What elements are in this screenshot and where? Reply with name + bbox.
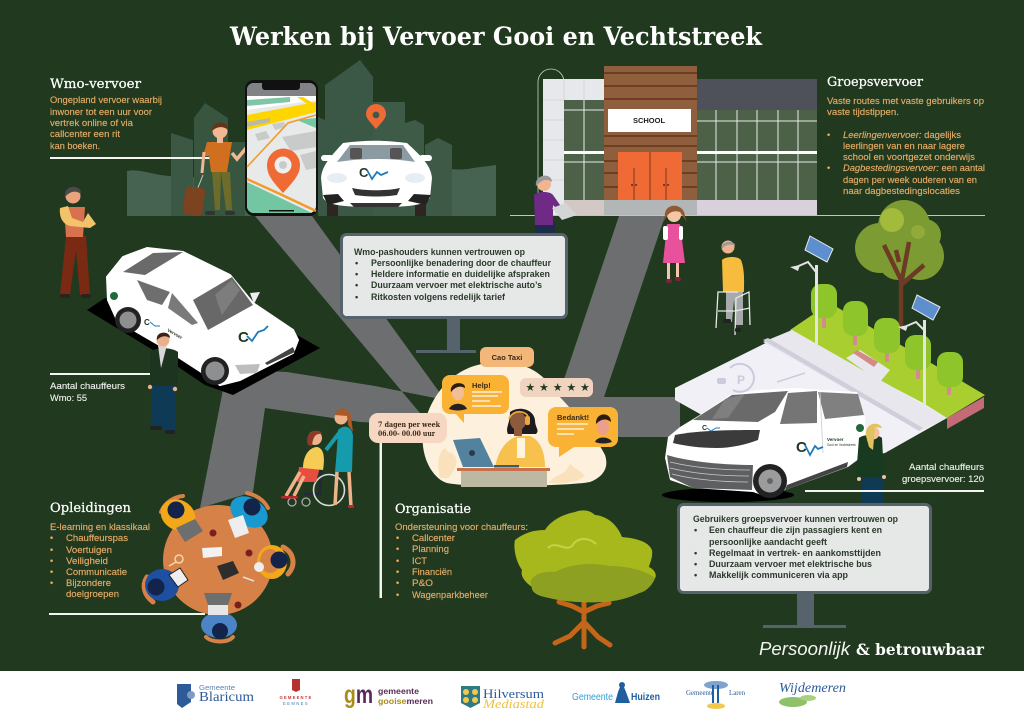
list: Opleidingen: • xyxy=(50,556,53,566)
list: Opleidingen: E-learning en klassikaal xyxy=(50,522,150,532)
illustration: older woman with paper xyxy=(534,176,577,234)
icon: man with suitcase xyxy=(182,123,247,216)
illustration: tree bottom xyxy=(514,510,656,647)
illustration: parking platform xyxy=(675,330,947,470)
illustration: callcenter scene xyxy=(423,362,606,487)
billboard: Gebruikers groepsvervoer xyxy=(678,504,930,628)
callout: Help speech bubble xyxy=(442,375,509,423)
list: Organisatie: • xyxy=(396,567,399,577)
list: Organisatie: ICT xyxy=(412,556,427,566)
text: Gebruikers groepsvervoer list: Een chauffeur die zijn passagiers kent en xyxy=(709,525,882,535)
logo on car: C xyxy=(238,329,249,346)
list: Groepsvervoer types: leerlingen van en naar lagere xyxy=(843,141,965,151)
text: Wmo-pashouders list: • xyxy=(355,258,358,268)
logo: Laren: Laren xyxy=(729,689,745,697)
logo: Blaricum xyxy=(177,683,254,708)
logo on van: Gooi en Vechtstreek xyxy=(827,443,856,447)
callout: rating stars xyxy=(520,378,594,397)
illustration: white van xyxy=(662,388,867,502)
logo on van: Vervoer xyxy=(827,437,844,442)
panel: Groepsvervoer xyxy=(827,75,985,196)
text: Gebruikers groepsvervoer list: persoonlijke aandacht geeft xyxy=(709,537,827,547)
illustration: woman driver xyxy=(856,424,886,503)
callout: Bedankt speech bubble xyxy=(548,407,618,457)
logo: Laren: Gemeente xyxy=(686,689,714,697)
text: Wmo-pashouders list: Duurzaam vervoer met elektrische auto’s xyxy=(371,280,542,290)
text: chauffeurs groepsvervoer: groepsvervoer: 120 xyxy=(902,474,984,484)
text: Wmo-pashouders list xyxy=(354,247,551,302)
text: Wmo-pashouders list: Heldere informatie en duidelijke afspraken xyxy=(371,269,550,279)
callout: Help speech bubble: Help! xyxy=(472,381,491,390)
laptop xyxy=(453,438,519,468)
logo on car: C xyxy=(144,318,150,327)
trees on grass xyxy=(811,284,963,395)
list: Opleidingen: Bijzondere xyxy=(66,578,111,588)
list: Opleidingen xyxy=(50,522,150,599)
heading: Opleidingen: Opleidingen xyxy=(50,501,132,516)
text: Gebruikers groepsvervoer list: • xyxy=(694,570,697,580)
list: Opleidingen: • xyxy=(50,533,53,543)
text: Wmo-pashouders list: • xyxy=(355,292,358,302)
text: Wmo-vervoer description: callcenter een rit xyxy=(50,129,120,139)
title: Werken bij Vervoer Gooi en Vechtstreek xyxy=(229,22,763,51)
list: Groepsvervoer types: • xyxy=(827,130,830,140)
text: Groepsvervoer description: vaste tijdstippen. xyxy=(827,107,899,117)
illustration: white car front xyxy=(321,141,432,216)
logo: Huizen: Gemeente xyxy=(572,692,613,703)
text: Wmo-pashouders list: • xyxy=(355,280,358,290)
list: Groepsvervoer types xyxy=(827,130,985,196)
logo on car: Vervoer xyxy=(166,328,184,340)
illustration: man with crossed arms xyxy=(60,187,96,298)
caregiver xyxy=(335,472,351,507)
list: Organisatie: P&O xyxy=(412,578,433,588)
logo: Gooisemeren: gooisemeren xyxy=(378,696,433,706)
roads xyxy=(200,216,680,508)
text: Wmo-vervoer description xyxy=(50,95,162,151)
vertical line: Organisatie xyxy=(380,443,382,598)
text: Gebruikers groepsvervoer list xyxy=(693,514,898,580)
logo: Wijdemeren xyxy=(779,681,846,707)
logo: Eemnes xyxy=(279,679,313,706)
logo: Blaricum: Blaricum xyxy=(199,690,254,705)
illustration: school building xyxy=(538,66,817,216)
list: Opleidingen: Veiligheid xyxy=(66,556,108,566)
logo: Huizen: Huizen xyxy=(631,692,660,703)
list: Groepsvervoer types: naar dagbestedingslocaties xyxy=(843,186,960,196)
text: Wmo-pashouders list: Persoonlijke benadering door de chauffeur xyxy=(371,258,551,268)
list: Opleidingen: Chauffeurspas xyxy=(66,533,128,543)
list: Organisatie: • xyxy=(396,544,399,554)
logo on car: C xyxy=(359,165,369,180)
list: Opleidingen: Communicatie xyxy=(66,567,127,577)
list: Organisatie: Callcenter xyxy=(412,533,455,543)
panel: Wmo-vervoer xyxy=(50,77,210,159)
callout: opening hours: 7 dagen per week xyxy=(378,420,441,429)
illustration: girl in pink dress xyxy=(662,206,687,283)
text: Gebruikers groepsvervoer list: Regelmaat in vertrek- en aankomsttijden xyxy=(709,548,881,558)
callout: Cao Taxi: Cao Taxi xyxy=(492,353,522,362)
text: chauffeurs Wmo: Wmo: 55 xyxy=(50,393,87,403)
person top left xyxy=(155,493,201,537)
list: Opleidingen: Voertuigen xyxy=(66,545,112,555)
list: Organisatie xyxy=(395,522,528,600)
list: Groepsvervoer types: school en voortgezet onderwijs xyxy=(843,152,975,162)
logo: Huizen xyxy=(572,682,660,703)
illustration: grass strip with trees xyxy=(790,284,985,429)
logo: Hilversum: Hilversum xyxy=(483,686,544,701)
logos row xyxy=(177,679,846,711)
logo: Gooisemeren xyxy=(344,681,433,709)
billboard: Wmo-pashouders xyxy=(342,234,566,353)
list: Organisatie: • xyxy=(396,533,399,543)
text: Gebruikers groepsvervoer list: Duurzaam vervoer met elektrische bus xyxy=(709,559,872,569)
panel: Opleidingen xyxy=(49,501,205,615)
laptops and papers xyxy=(169,515,254,615)
text: chauffeurs Wmo xyxy=(50,373,150,403)
sign: school xyxy=(608,109,691,132)
panel: Organisatie xyxy=(395,502,528,600)
list: Organisatie: • xyxy=(396,590,399,600)
list: Opleidingen: • xyxy=(50,567,53,577)
heading: Organisatie: Organisatie xyxy=(395,502,471,517)
logo: Gooisemeren: gemeente xyxy=(378,686,419,696)
text: Wmo-vervoer description: kan boeken. xyxy=(50,141,100,151)
list: Groepsvervoer types: dagen per week ouderen van en xyxy=(843,175,977,185)
logo: Eemnes: EEMNES xyxy=(283,701,309,706)
logo on van xyxy=(796,437,856,456)
slogan: & betrouwbaar xyxy=(856,640,985,659)
person right xyxy=(254,545,293,579)
text: chauffeurs groepsvervoer: Aantal chauffeurs xyxy=(909,462,984,472)
list: Organisatie: • xyxy=(396,578,399,588)
illustration: tree top right xyxy=(855,200,944,330)
illustration: meeting table from above xyxy=(144,490,293,642)
illustration: white car isometric xyxy=(87,248,320,395)
text: Gebruikers groepsvervoer list: Makkelijk communiceren via app xyxy=(709,570,848,580)
text: Wmo-pashouders list: Wmo-pashouders kunnen vertrouwen op xyxy=(354,247,525,257)
list: Groepsvervoer types: • xyxy=(827,163,830,173)
list: Organisatie: Ondersteuning voor chauffeurs: xyxy=(395,522,528,532)
icon: orange map pin on phone xyxy=(267,148,300,193)
logo on car xyxy=(144,318,268,346)
callout: opening hours xyxy=(369,413,447,443)
divider line xyxy=(510,215,985,216)
text: Wmo-pashouders list: Ritkosten volgens redelijk tarief xyxy=(371,292,506,302)
icon: smartphone with map xyxy=(245,80,318,216)
decorative leaves xyxy=(438,448,585,483)
callout: Cao Taxi xyxy=(480,347,534,367)
text: Wmo-vervoer description: inwoner tot een uur voor xyxy=(50,107,152,117)
list: Organisatie: Financiën xyxy=(412,567,452,577)
list: Groepsvervoer types: Dagbestedingsvervoer: een aantal xyxy=(843,163,985,173)
illustration: male driver xyxy=(148,333,178,434)
logo: Hilversum xyxy=(461,686,545,711)
text: Wmo-pashouders list: • xyxy=(355,269,358,279)
illustration: city skyline xyxy=(127,60,496,216)
logo: Eemnes: GEMEENTE xyxy=(279,695,313,700)
heading: Groepsvervoer: Groepsvervoer xyxy=(827,75,924,90)
icon: solar street lamp right xyxy=(898,295,940,405)
icon: solar street lamp left xyxy=(790,236,833,347)
logo: Laren xyxy=(686,681,745,709)
illustration: older man with walker xyxy=(716,240,750,335)
callout: Bedankt speech bubble: Bedankt! xyxy=(557,413,589,422)
list: Opleidingen: • xyxy=(50,578,53,588)
callout: opening hours: 06.00- 00.00 uur xyxy=(378,429,436,438)
logo: Blaricum: Gemeente xyxy=(199,683,235,692)
list: Groepsvervoer types: Leerlingenvervoer: dagelijks xyxy=(843,130,961,140)
text: Wmo-vervoer description: vertrek online of via xyxy=(50,118,134,128)
logo: Gooisemeren: gm xyxy=(344,681,373,709)
text: Wmo-vervoer description: Ongepland vervoer waarbij xyxy=(50,95,162,105)
desk xyxy=(457,468,550,487)
person top right xyxy=(225,490,273,534)
illustration: white van: C xyxy=(702,425,707,432)
heading: Wmo-vervoer: Wmo-vervoer xyxy=(50,77,142,92)
icon: EV parking: P xyxy=(737,373,745,387)
text: chauffeurs groepsvervoer xyxy=(805,462,984,492)
agent xyxy=(495,409,545,467)
person bottom xyxy=(201,612,237,642)
text: chauffeurs Wmo: Aantal chauffeurs xyxy=(50,381,125,391)
list: Organisatie: Wagenparkbeheer xyxy=(412,590,488,600)
logo: Wijdemeren: Wijdemeren xyxy=(779,681,846,696)
logo on van: C xyxy=(796,439,807,456)
text: Gebruikers groepsvervoer list: • xyxy=(694,548,697,558)
person left xyxy=(144,569,179,602)
sign: school: SCHOOL xyxy=(633,116,665,125)
text: Gebruikers groepsvervoer list: Gebruikers groepsvervoer kunnen vertrouwen op xyxy=(693,514,898,524)
text: Gebruikers groepsvervoer list: • xyxy=(694,525,697,535)
footer band xyxy=(0,671,1024,724)
text: Groepsvervoer description: Vaste routes met vaste gebruikers op xyxy=(827,96,984,106)
callout: rating stars: ★★★★★ xyxy=(525,381,594,394)
icon: EV parking xyxy=(717,364,805,392)
bench xyxy=(853,350,878,367)
logo: Hilversum: Mediastad xyxy=(482,697,545,711)
list: Opleidingen: • xyxy=(50,545,53,555)
list: Organisatie: Planning xyxy=(412,544,449,554)
text: Gebruikers groepsvervoer list: • xyxy=(694,559,697,569)
list: Opleidingen: doelgroepen xyxy=(66,589,119,599)
text: Groepsvervoer description xyxy=(827,96,984,117)
doors xyxy=(618,152,682,200)
icon: map pin xyxy=(366,104,386,129)
slogan: Persoonlijk xyxy=(759,639,851,659)
list: Organisatie: • xyxy=(396,556,399,566)
slogan xyxy=(759,639,985,659)
illustration: wheelchair and caregiver xyxy=(281,408,354,508)
